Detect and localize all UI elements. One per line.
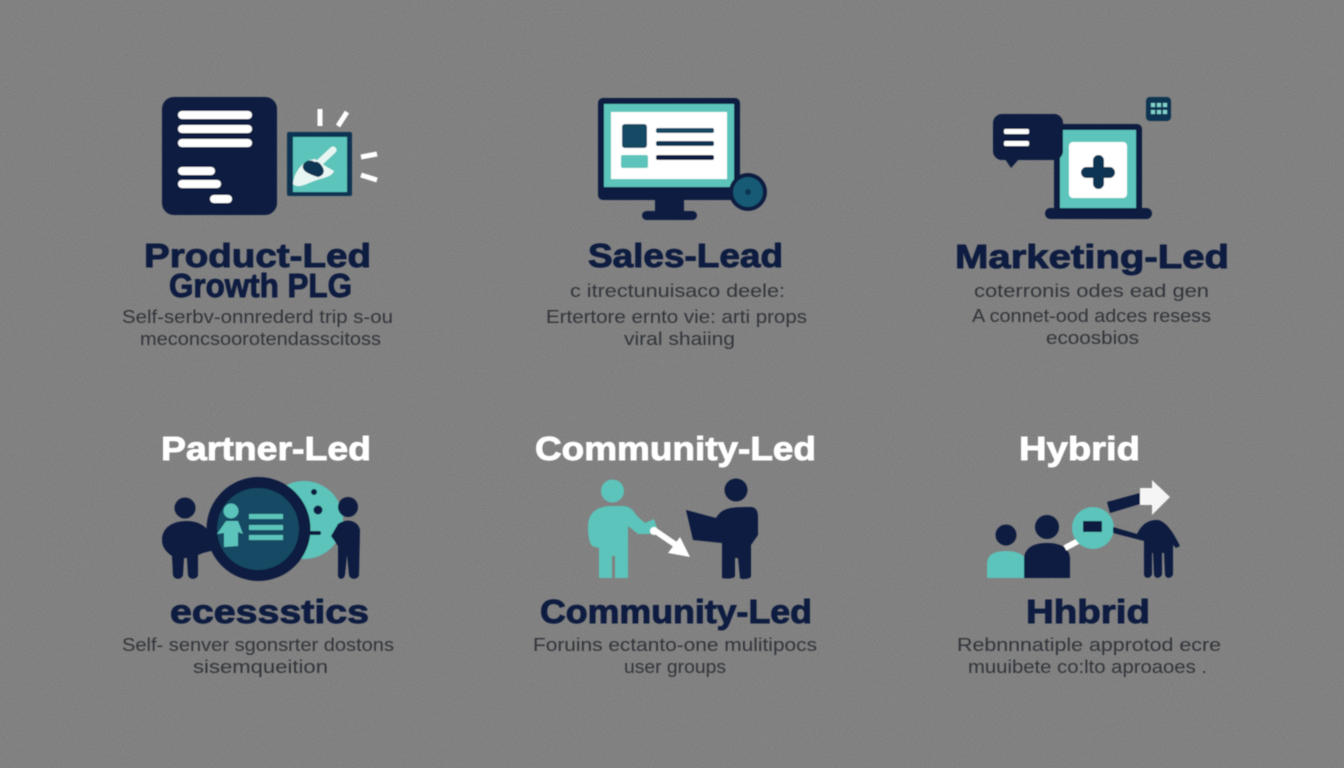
heading: Product-Led Growth PLG: Growth PLG <box>169 267 352 304</box>
description: community-led: Foruins ectanto-one mulitipocs <box>533 635 817 655</box>
description: marketing-led: ecoosbios <box>1046 328 1139 348</box>
panel: marketing-led <box>955 97 1229 348</box>
heading: Sales-Lead: Sales-Lead <box>588 237 783 274</box>
description: marketing-led <box>972 281 1211 348</box>
description: sales-lead <box>546 281 807 349</box>
description: hybrid <box>957 635 1221 677</box>
description: marketing-led: A connet-ood adces resess <box>972 306 1211 326</box>
heading: Community-Led (white): Community-Led <box>535 430 816 467</box>
description: sales-lead: c itrectunuisaco deele: <box>570 281 785 301</box>
description: sales-lead: Ertertore ernto vie: arti props <box>546 307 807 327</box>
description: product-led: meconcsoorotendasscitoss <box>140 329 381 349</box>
description: product-led <box>122 307 393 349</box>
panel: sales-lead <box>546 98 807 349</box>
panel: hybrid <box>957 430 1221 677</box>
heading: Community-Led (navy): Community-Led <box>540 593 812 630</box>
description: community-led: user groups <box>624 657 726 677</box>
description: community-led <box>533 635 817 677</box>
icon: document with product tile <box>162 97 377 215</box>
heading: Product-Led Growth PLG: Product-Led <box>144 237 371 274</box>
description: sales-lead: viral shaiing <box>624 329 735 349</box>
heading: ecessstics: ecessstics <box>170 593 369 630</box>
icon: people around magnifier <box>162 477 360 581</box>
description: partner-led <box>122 635 394 677</box>
icon: two people exchanging <box>588 478 758 579</box>
description: hybrid: Rebnnnatiple approtod ecre <box>957 635 1221 655</box>
icon: monitor with badge <box>598 98 767 220</box>
description: hybrid: muuibete co:lto aproaoes . <box>968 657 1207 677</box>
panel: product-led growth <box>122 97 393 349</box>
icon: group linked to presenter with arrow <box>987 480 1180 578</box>
heading: Hybrid (white): Hybrid <box>1019 430 1140 467</box>
icon: laptop with speech bubble <box>993 97 1171 219</box>
heading: Hybrid (navy): Hhbrid <box>1026 593 1150 630</box>
heading: Marketing-Led: Marketing-Led <box>955 238 1229 275</box>
description: product-led: Self-serbv-onnrederd trip s-ou <box>122 307 393 327</box>
description: partner-led: Self- senver sgonsrter dostons <box>122 635 394 655</box>
panel: community-led <box>533 430 817 677</box>
description: marketing-led: coterronis odes ead gen <box>974 281 1209 301</box>
panel: partner-led <box>122 430 394 677</box>
description: partner-led: sisemqueition <box>193 657 328 677</box>
heading: Partner-Led: Partner-Led <box>161 430 371 467</box>
heading: Product-Led Growth PLG <box>144 237 371 304</box>
